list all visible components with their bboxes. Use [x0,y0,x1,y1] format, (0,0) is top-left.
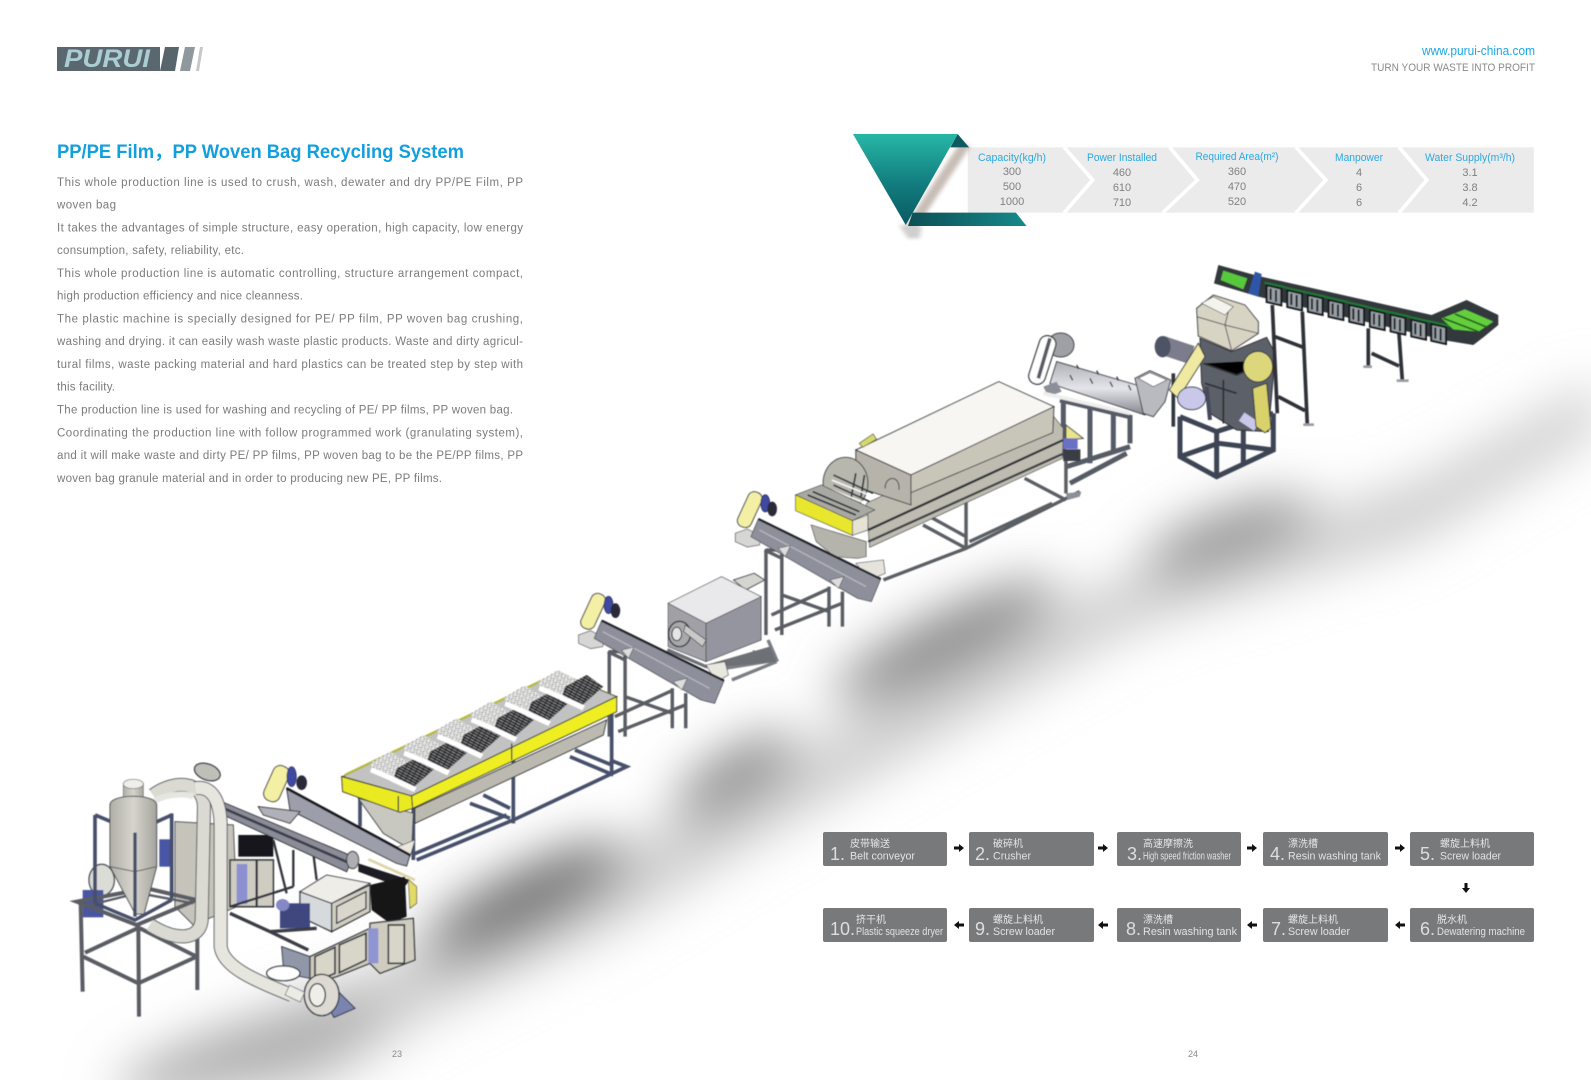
website and slogan [1371,44,1535,74]
step 8: 漂洗槽 [1143,913,1173,926]
arrow [1462,883,1470,893]
step 9 [969,908,1094,942]
column: required area: 520 [1228,196,1246,208]
step 2 [969,832,1094,866]
column: capacity: Capacity(kg/h) [978,152,1046,164]
step 5: Screw loader [1440,850,1501,862]
description text block: high production efficiency and nice cleanness. [57,290,303,302]
column: manpower: Manpower [1335,152,1383,164]
step 8 [1117,908,1241,942]
website and slogan: TURN YOUR WASTE INTO PROFIT [1371,62,1535,74]
title: PP/PE Film，PP Woven Bag Recycling System [57,141,464,163]
step 4: 漂洗槽 [1288,837,1318,850]
column: manpower: 6 [1356,197,1362,209]
step 2: Crusher [993,850,1031,862]
description text block: Coordinating the production line with follow programmed work (granulating system), [57,428,523,440]
column: manpower: 4 [1356,167,1362,179]
arrow [1395,844,1405,852]
specification table panel [853,134,1534,238]
step 1: 皮带输送 [850,837,890,850]
description text block: woven bag [56,200,116,212]
machine: cyclone with stand and blower pipes [77,760,355,1017]
column: required area [1196,151,1278,208]
machine: crusher [1155,295,1273,477]
step 9: 9. [975,919,990,939]
description text block: tural films, waste packing material and hard plastics can be treated step by step with [57,359,523,371]
step 6: 6. [1420,919,1435,939]
step 3: 3. [1127,844,1142,864]
step 7: Screw loader [1288,926,1350,938]
step 8: Resin washing tank [1143,926,1237,938]
description text block: This whole production line is automatic controlling, structure arrangement compact, [57,268,523,280]
website and slogan: www.purui-china.com [1421,44,1535,58]
description text block: woven bag granule material and in order to producing new PE, PP films. [56,473,442,485]
arrow [1098,844,1108,852]
arrow [1395,921,1405,929]
column: manpower: 6 [1356,182,1362,194]
step 9: Screw loader [993,926,1055,938]
machine: resin washing tank with paddles [342,670,627,860]
arrow [1098,921,1108,929]
teal triangle emblem [853,134,1026,238]
process flow steps [823,832,1534,942]
step 7 [1263,908,1388,942]
step 1: Belt conveyor [850,850,915,862]
column: water supply [1425,152,1515,209]
column: water supply: Water Supply(m³/h) [1425,152,1515,164]
column: power installed: 460 [1113,167,1131,179]
description text block: and it will make waste and dirty PE/ PP films, PP woven bag to be the PE/PP films, PP [57,450,523,462]
logo: PURUI [57,45,203,73]
column: required area: 470 [1228,181,1246,193]
machine: screw dewatering loader [1027,333,1171,483]
logo: PURUI: PURUI [64,45,151,73]
step 3: High speed friction washer [1143,850,1231,862]
description text block: this facility. [57,382,115,394]
description text block: The plastic machine is specially designed for PE/ PP film, PP woven bag crushing, [57,314,523,326]
arrow [954,844,964,852]
arrow [1247,921,1257,929]
step 10: 10. [830,919,855,939]
description text block: consumption, safety, reliability, etc. [57,245,244,257]
step 10: 挤干机 [856,913,886,926]
column: manpower [1335,152,1383,209]
step 10: Plastic squeeze dryer [856,926,943,938]
machine: high speed friction washer [796,382,1083,580]
column: power installed [1087,152,1157,209]
step 5: 螺旋上料机 [1440,837,1490,850]
description text block: The production line is used for washing and recycling of PE/ PP films, PP woven bag. [57,404,513,416]
column: capacity: 1000 [1000,196,1024,208]
column: water supply: 4.2 [1462,197,1478,209]
step 1: 1. [830,844,845,864]
machine: plastic squeeze dryer [159,763,417,984]
step 6: Dewatering machine [1437,926,1525,938]
page number 24: 24 [1188,1049,1198,1059]
page number 23: 23 [392,1049,402,1059]
step 2: 2. [975,844,990,864]
step 3 [1117,832,1241,866]
column: water supply: 3.8 [1462,182,1478,194]
machine: belt conveyor [1214,265,1498,425]
column: water supply: 3.1 [1462,167,1478,179]
step 5 [1410,832,1534,866]
chevron strip [968,147,1534,213]
description text block: It takes the advantages of simple structure, easy operation, high capacity, low energy [57,222,523,234]
description text block [56,177,523,485]
column: power installed: Power Installed [1087,152,1157,164]
machine: screw loader (lower) [579,591,724,737]
column: capacity: 500 [1003,181,1021,193]
background shadows [108,380,1591,1080]
column: power installed: 710 [1113,197,1131,209]
step 8: 8. [1126,919,1141,939]
machine: screw loader (upper) [735,490,881,635]
step 2: 破碎机 [993,837,1023,850]
step 4: Resin washing tank [1288,850,1381,862]
step 1 [823,832,947,866]
step 6 [1410,908,1534,942]
description text block: This whole production line is used to crush, wash, dewater and dry PP/PE Film, PP [57,177,523,189]
production line illustration [77,265,1498,1017]
step 4 [1263,832,1388,866]
step 4: 4. [1270,844,1285,864]
column: required area: Required Area(m²) [1196,151,1278,163]
description text block: washing and drying. it can easily wash waste plastic products. Waste and dirty agricul- [56,336,523,348]
step 9: 螺旋上料机 [993,913,1043,926]
column: required area: 360 [1228,166,1246,178]
step 6: 脱水机 [1437,913,1467,926]
step 10 [823,908,947,942]
machine: resin washing tank box [666,573,777,682]
step 7: 7. [1271,919,1286,939]
step 7: 螺旋上料机 [1288,913,1338,926]
step 5: 5. [1420,844,1435,864]
arrow [954,921,964,929]
column: capacity: 300 [1003,166,1021,178]
column: power installed: 610 [1113,182,1131,194]
column: capacity [978,152,1046,208]
step 3: 高速摩擦洗 [1143,837,1193,850]
arrow [1247,844,1257,852]
